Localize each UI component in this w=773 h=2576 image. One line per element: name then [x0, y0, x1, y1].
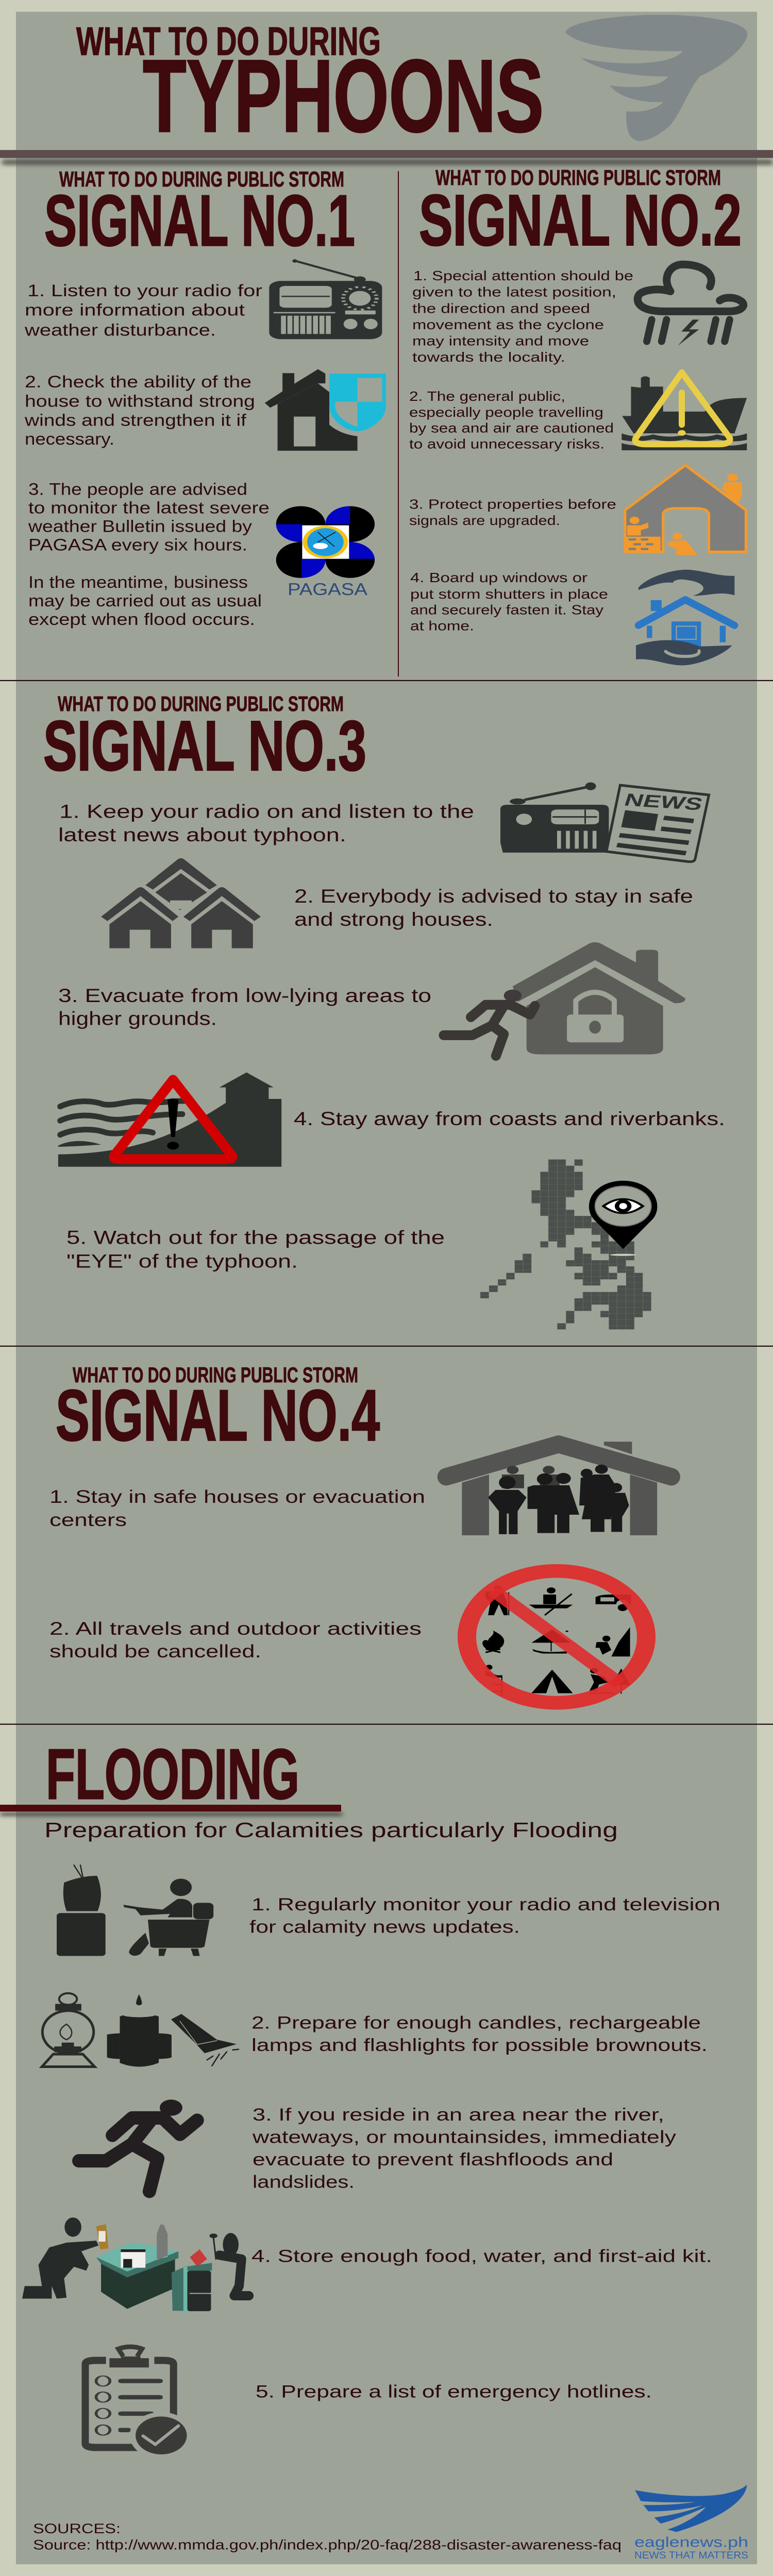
text: signal 1 item 2: necessary.: [25, 430, 114, 449]
logo: eaglenews.ph: [634, 2484, 748, 2561]
text: signal 2 item 4: put storm shutters in place: [410, 586, 608, 602]
text: signal 2 item 2: to avoid unnecessary risks.: [409, 436, 604, 451]
icon: ship warning: [621, 372, 747, 450]
icon: running person: [79, 2099, 197, 2191]
text: signal 1 item 1: [24, 282, 262, 340]
icon: person running to locked house: [444, 942, 685, 1056]
text: signal 2 item 4: [410, 570, 608, 633]
text: flooding item 3: evacuate to prevent flashfloods and: [253, 2149, 613, 2169]
text: signal 3 item 3: [58, 985, 431, 1029]
heading: signal 4: WHAT TO DO DURING PUBLIC STORM: [73, 1363, 358, 1387]
text: sources: Source: http://www.mmda.gov.ph/index.php/20-faq/288-disaster-awareness-faq: [33, 2537, 621, 2552]
text: signal 1 item 1: 1. Listen to your radio for: [27, 282, 262, 300]
text: signal 1 item 3: weather Bulletin issued by: [28, 517, 253, 536]
text: signal 2 item 1: the direction and speed: [412, 301, 590, 316]
icon: people storing emergency kit: [22, 2217, 249, 2313]
icon: orange house with workers: [625, 465, 746, 555]
text: signal 3 item 5: [66, 1227, 445, 1272]
flooding bar: [0, 1805, 341, 1811]
top band shadow: [2, 159, 773, 165]
text: flooding item 1: for calamity news updates.: [249, 1917, 520, 1937]
text: signal 2 item 1: 1. Special attention should be: [413, 268, 633, 283]
text: FLOODING: [46, 1734, 299, 1814]
icon: tornado: [565, 15, 747, 141]
text: signal 2 item 2: 2. The general public,: [409, 388, 565, 404]
text: signal 1 item 3: may be carried out as usual: [28, 592, 262, 611]
heading: signal 1: [44, 167, 355, 261]
text: SIGNAL NO.1: [44, 180, 355, 261]
text: signal 2 item 1: given to the latest position,: [412, 284, 616, 300]
text: signal 1 item 3: except when flood occurs.: [28, 611, 255, 629]
text: signal 2 item 2: especially people travelling: [409, 404, 603, 420]
text: signal 4 item 2: should be cancelled.: [49, 1641, 261, 1661]
logo: eaglenews.ph: eaglenews.ph: [634, 2534, 748, 2550]
text: signal 2 item 1: may intensity and move: [412, 333, 589, 348]
text: signal 1 item 2: winds and strengthen it if: [24, 411, 246, 430]
text: signal 3 item 1: latest news about typhoon.: [58, 824, 346, 845]
text: signal 3 item 3: 3. Evacuate from low-lying areas to: [58, 985, 431, 1006]
top band: [0, 150, 773, 158]
divider line: [0, 1346, 773, 1347]
divider between signal 1 and 2: [398, 171, 399, 676]
icon: Philippines pixel map with eye pin: [480, 1159, 657, 1329]
icon: outdoor activities prohibited: [467, 1571, 646, 1703]
icon: person watching tv: [57, 1865, 213, 1956]
heading: signal 4: [56, 1363, 380, 1456]
icon: coast warning: [58, 1073, 281, 1167]
icon: family in house: [446, 1442, 671, 1535]
text: flooding item 4: 4. Store enough food, water, and first-aid kit.: [251, 2246, 712, 2266]
icon: PAGASA logo: PAGASA: [288, 580, 368, 599]
text: signal 2 item 3: signals are upgraded.: [409, 513, 560, 528]
text: signal 2 item 1: [412, 268, 633, 365]
text: flooding item 3: wateways, or mountainsides, immediately: [252, 2127, 676, 2147]
icon: radio and newspaper: NEWS: [622, 790, 705, 814]
text: signal 4 item 1: [49, 1486, 425, 1530]
icon: house with shield: [265, 369, 386, 451]
text: signal 1 item 3: 3. The people are advised: [28, 480, 247, 499]
text: signal 1 item 3: to monitor the latest severe: [28, 499, 270, 517]
divider line: [0, 1724, 773, 1725]
text: flooding item 1: [249, 1894, 720, 1937]
text: signal 1 item 3: [28, 480, 270, 629]
text: signal 3 item 1: 1. Keep your radio on and listen to the: [59, 801, 474, 822]
icon: lantern, candles and flashlight: [42, 1993, 239, 2066]
text: signal 3 item 5: "EYE" of the typhoon.: [66, 1251, 298, 1272]
text: signal 1 item 2: 2. Check the ability of the: [25, 373, 251, 392]
text: signal 2 item 3: [409, 497, 616, 528]
text: signal 4 item 2: [49, 1618, 422, 1661]
text: flooding item 3: [252, 2105, 676, 2192]
divider line: [0, 680, 773, 681]
text: signal 1 item 3: PAGASA every six hours.: [28, 536, 247, 554]
text: flooding item 2: [251, 2013, 708, 2055]
text: signal 3 item 4: 4. Stay away from coasts and riverbanks.: [294, 1108, 725, 1129]
icon: hands protecting house: [636, 570, 734, 665]
heading: signal 3: [43, 692, 366, 785]
text: signal 2 item 4: 4. Board up windows or: [410, 570, 587, 585]
title: [76, 19, 544, 154]
text: signal 3 item 1: [58, 801, 474, 845]
text: signal 4 item 1: centers: [49, 1510, 127, 1530]
text: sources: [33, 2521, 621, 2552]
text: sources: SOURCES:: [33, 2521, 121, 2536]
icon: PAGASA logo: [276, 506, 375, 599]
text: signal 2 item 4: and securely fasten it. Stay: [410, 602, 604, 618]
text: flooding item 2: 2. Prepare for enough candles, rechargeable: [251, 2013, 701, 2032]
text: signal 4 item 1: 1. Stay in safe houses or evacuation: [49, 1486, 425, 1506]
text: flooding item 1: 1. Regularly monitor your radio and television: [251, 1894, 720, 1914]
text: flooding item 2: lamps and flashlights for possible brownouts.: [251, 2035, 708, 2055]
subheading: preparation: Preparation for Calamities particularly Flooding: [44, 1819, 618, 1842]
text: signal 2 item 3: 3. Protect properties before: [409, 497, 616, 512]
heading: signal 3: SIGNAL NO.3: [43, 706, 366, 785]
text: flooding item 3: landslides.: [253, 2172, 355, 2192]
text: signal 3 item 2: 2. Everybody is advised to stay in safe: [294, 886, 693, 907]
icon: radio: [269, 259, 382, 339]
text: signal 4 item 2: 2. All travels and outdoor activities: [49, 1618, 422, 1638]
text: signal 1 item 1: weather disturbance.: [24, 321, 216, 340]
text: flooding item 3: 3. If you reside in an area near the river,: [253, 2105, 664, 2125]
icon: three houses: [101, 858, 261, 948]
heading: signal 3: WHAT TO DO DURING PUBLIC STORM: [58, 692, 344, 716]
text: signal 1 item 3: In the meantime, business: [28, 573, 248, 592]
heading: signal 4: SIGNAL NO.4: [56, 1375, 380, 1456]
title: WHAT TO DO DURING: [76, 19, 381, 63]
text: signal 3 item 3: higher grounds.: [58, 1008, 217, 1029]
icon: checklist clipboard: [85, 2347, 193, 2459]
text: signal 1 item 1: more information about: [25, 301, 245, 319]
text: signal 2 item 2: [409, 388, 614, 451]
text: signal 1 item 2: house to withstand strong: [25, 392, 255, 411]
text: signal 2 item 1: towards the locality.: [412, 350, 565, 365]
text: signal 3 item 2: and strong houses.: [294, 909, 493, 930]
text: signal 2 item 1: movement as the cyclone: [412, 317, 604, 332]
flooding bar shadow: [0, 1812, 342, 1816]
text: signal 3 item 5: 5. Watch out for the passage of the: [66, 1227, 445, 1248]
icon: storm cloud: [637, 264, 744, 346]
text: flooding item 5: 5. Prepare a list of emergency hotlines.: [256, 2382, 652, 2401]
text: signal 3 item 2: [294, 886, 693, 930]
text: signal 1 item 2: [24, 373, 255, 449]
text: signal 2 item 4: at home.: [410, 618, 474, 633]
icon: radio and newspaper: [500, 783, 709, 862]
heading: signal 1: WHAT TO DO DURING PUBLIC STORM: [59, 167, 344, 191]
text: signal 2 item 2: by sea and air are cautioned: [409, 420, 614, 436]
